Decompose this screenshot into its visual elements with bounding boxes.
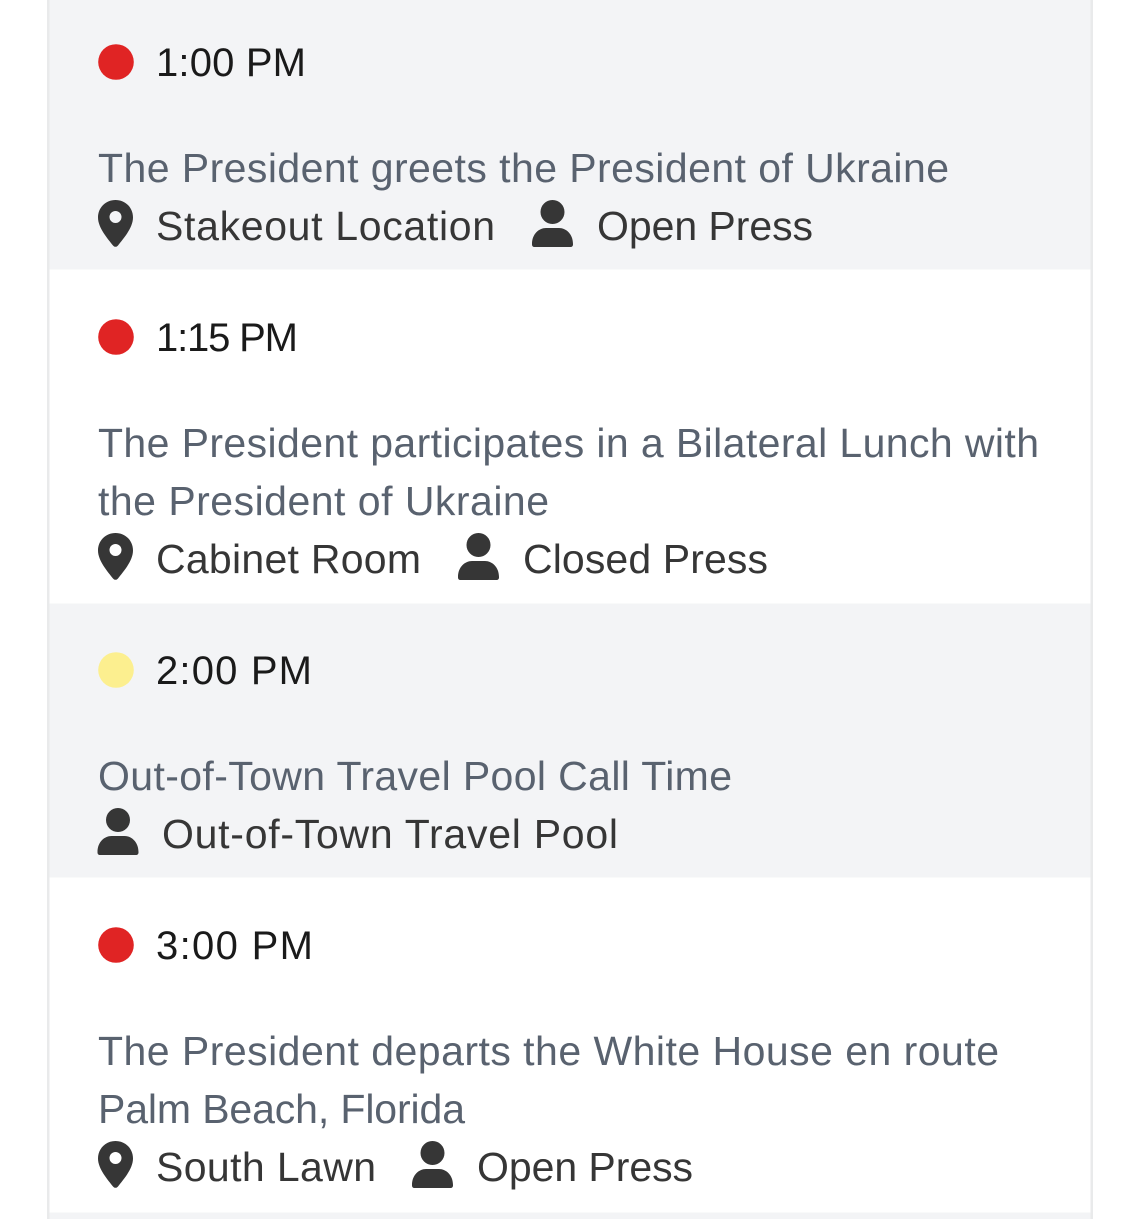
icon: person [458,533,499,580]
description: the President of Ukraine [98,478,549,524]
description: Palm Beach, Florida [98,1086,465,1132]
description: The President greets the President of Ukraine [98,145,949,191]
icon: location pin [98,533,133,580]
icon: person [532,200,573,247]
press access: Open Press [477,1144,693,1190]
panel: next event edge [50,1212,1090,1219]
location: Stakeout Location [156,203,495,249]
time: 3:00 PM [156,924,313,968]
location: Cabinet Room [156,536,421,582]
description: Out-of-Town Travel Pool Call Time [98,753,732,799]
status dot: red [98,44,134,80]
panel: 2:00 PM event [50,604,1090,878]
icon: location pin [98,1141,133,1188]
location: South Lawn [156,1144,376,1190]
icon: location pin [98,200,133,247]
description: The President participates in a Bilateral Lunch with [98,420,1039,466]
description [98,420,1039,524]
panel: 3:00 PM event [50,878,1090,1212]
press access: Closed Press [523,536,768,582]
status dot: red [98,319,134,355]
description [98,1028,999,1132]
panel: 1:00 PM event [50,0,1090,270]
status dot: red [98,927,134,963]
time: 1:15 PM [156,316,298,360]
icon: person [98,808,138,855]
press access: Open Press [597,203,813,249]
press pool: Out-of-Town Travel Pool [162,811,618,857]
description: The President departs the White House en route [98,1028,999,1074]
status dot: yellow [98,652,134,688]
time: 1:00 PM [156,41,306,85]
panel: 1:15 PM event [50,270,1090,604]
icon: person [412,1141,453,1188]
time: 2:00 PM [156,649,312,693]
